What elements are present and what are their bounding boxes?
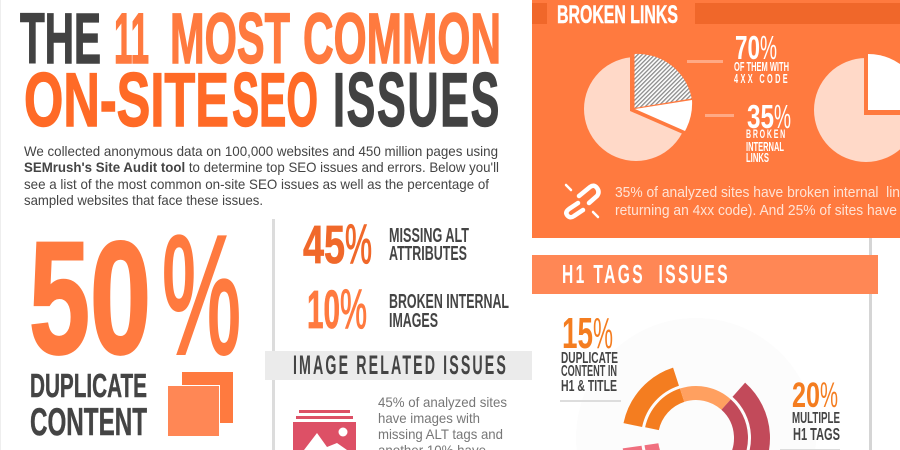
stat: 10% broken internal images: % — [340, 277, 367, 340]
stat: 15% duplicate content in h1 and title — [560, 309, 621, 402]
title: ISSUES — [333, 58, 501, 143]
stat: 10% broken internal images: BROKEN INTERNAL — [389, 291, 509, 313]
stat: 15% duplicate content in h1 and title: H1 & TITLE — [561, 378, 617, 395]
title: 11 — [114, 0, 149, 79]
stat: 45% missing alt attributes: % — [345, 212, 372, 275]
stat: 70% with 4xx code: 4XX CODE — [734, 72, 790, 86]
50 percent figure: % — [162, 201, 241, 389]
intro paragraph: sampled websites that face these issues. — [24, 192, 263, 208]
intro paragraph: SEMrush's Site Audit tool to determine top SEO issues and errors. Below you'll — [24, 159, 499, 175]
stat: 10% broken internal images: IMAGES — [389, 310, 438, 332]
image issues text — [378, 394, 507, 450]
title: ON-SITE — [24, 58, 229, 143]
stat: 35% broken internal links: % — [774, 98, 791, 135]
duplicate content label — [30, 367, 147, 444]
title: THE — [20, 0, 101, 79]
stat: 45% missing alt attributes — [303, 212, 469, 275]
stat: 35% broken internal links: BROKEN — [746, 127, 787, 141]
stat: 20% multiple h1 tags: % — [820, 376, 838, 415]
stat: 15% duplicate content in h1 and title: DUPLICATE — [561, 350, 618, 367]
stat: 15% duplicate content in h1 and title: % — [593, 309, 613, 358]
stat: 70% with 4xx code: 70 — [735, 29, 760, 66]
image issues text: 45% of analyzed sites — [378, 394, 507, 410]
broken links text — [615, 185, 900, 219]
stat: 20% multiple h1 tags — [780, 376, 840, 450]
stat: 20% multiple h1 tags: MULTIPLE — [792, 410, 840, 427]
heading band: h1 tags issues — [532, 255, 878, 294]
stat: 45% missing alt attributes: ATTRIBUTES — [389, 243, 467, 265]
heading: broken links: BROKEN LINKS — [557, 1, 678, 29]
image issues text: have images with — [378, 410, 480, 426]
duplicate content label: DUPLICATE — [30, 367, 147, 404]
stat: 15% duplicate content in h1 and title: 15 — [562, 309, 593, 358]
stat: 15% duplicate content in h1 and title: CONTENT IN — [561, 363, 617, 380]
stat: 20% multiple h1 tags: 20 — [792, 376, 820, 415]
heading band: image related issues: IMAGE RELATED ISSUES — [293, 350, 508, 380]
stat: 70% with 4xx code — [734, 36, 789, 83]
icon: broken chain link — [566, 185, 598, 217]
50 percent figure: 50 — [29, 208, 151, 387]
stat: 50% duplicate content — [29, 201, 241, 444]
icon: duplicate squares — [167, 372, 233, 438]
intro paragraph: We collected anonymous data on 100,000 websites and 450 million pages using — [24, 143, 498, 159]
heading: broken links — [532, 3, 900, 24]
heading band: h1 tags issues: H1 TAGS ISSUES — [562, 259, 730, 289]
stat: 35% broken internal links: LINKS — [746, 151, 769, 165]
pie chart: broken link share — [584, 50, 700, 161]
intro paragraph — [24, 143, 499, 208]
duplicate content label: CONTENT — [30, 401, 147, 444]
broken links text: returning an 4xx code). And 25% of sites have — [615, 203, 897, 219]
title: COMMON — [303, 0, 501, 79]
stat: 35% broken internal links: 35 — [747, 98, 774, 135]
stat: 45% missing alt attributes: 45 — [303, 215, 345, 275]
title: MOST — [170, 0, 290, 79]
stat: 35% broken internal links: INTERNAL — [746, 140, 784, 154]
stat: 10% broken internal images — [307, 277, 509, 340]
stat: 70% with 4xx code: OF THEM WITH — [734, 60, 789, 74]
stat: 10% broken internal images: 10 — [307, 280, 340, 340]
title: SEO — [232, 58, 318, 143]
stat: 20% multiple h1 tags: H1 TAGS — [793, 424, 840, 444]
chart: h1 tags donut — [622, 368, 770, 450]
icon: image stack — [293, 410, 356, 450]
stat: 35% broken internal links — [746, 104, 790, 162]
heading band: image related issues — [265, 350, 532, 380]
intro paragraph: see a list of the most common on-site SEO issues as well as the percentage of — [24, 176, 489, 192]
connector lines — [687, 60, 734, 117]
pie chart: second — [814, 50, 900, 162]
stat: 70% with 4xx code: % — [760, 29, 777, 66]
vertical divider — [272, 219, 275, 450]
right vertical divider — [869, 238, 872, 450]
panel: broken links — [532, 0, 900, 238]
title — [20, 0, 501, 143]
stat: 45% missing alt attributes: MISSING ALT — [389, 225, 469, 247]
image issues text: missing ALT tags and — [378, 426, 503, 442]
